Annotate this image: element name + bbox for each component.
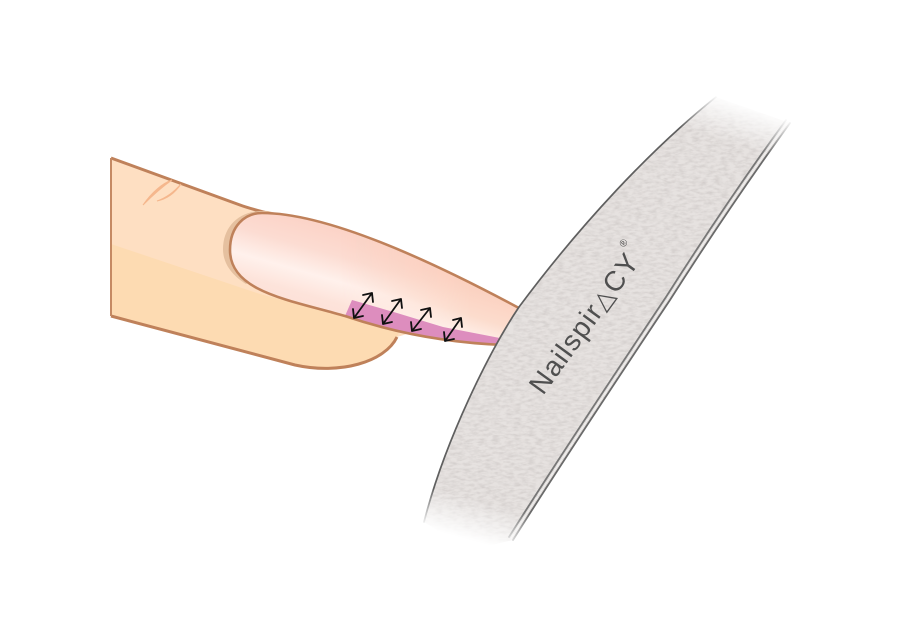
finger	[111, 158, 420, 368]
nail outline	[230, 213, 530, 345]
nail file	[400, 60, 830, 565]
file edge lines	[424, 97, 830, 560]
nail plate	[230, 213, 530, 346]
finger lower shade	[111, 244, 400, 368]
arrow 4	[444, 318, 462, 341]
finger outline	[111, 158, 397, 368]
file top fade	[640, 60, 830, 160]
brand text: Nailspir△CY	[523, 248, 645, 400]
finger back edge	[110, 158, 112, 316]
arrow 2	[382, 299, 402, 324]
arrows: filing direction	[353, 293, 462, 341]
filed pink area	[345, 300, 505, 345]
file bottom fade	[400, 490, 570, 565]
arrow 3	[411, 308, 431, 331]
arrow 1	[353, 293, 373, 318]
illustration: nail being filed	[110, 97, 791, 541]
finger skin	[111, 158, 420, 368]
nail tip tone	[381, 263, 517, 336]
knuckle creases	[143, 180, 181, 205]
registered mark: ®	[618, 237, 631, 250]
nail	[230, 213, 530, 346]
file board	[424, 97, 790, 550]
cuticle shadow	[223, 211, 280, 284]
